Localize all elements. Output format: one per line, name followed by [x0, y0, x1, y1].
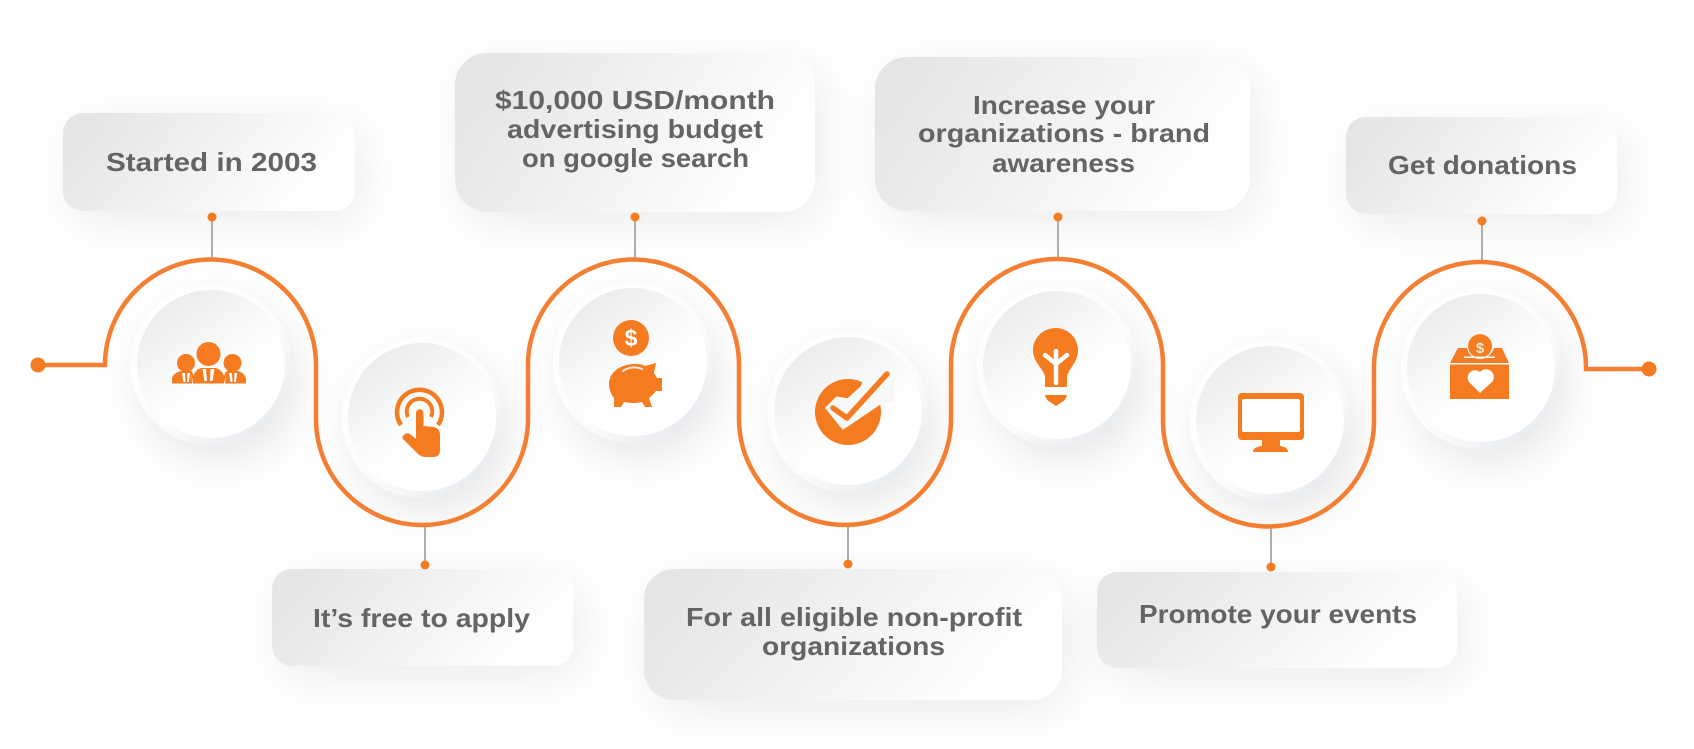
- panel: free to apply: It’s free to apply: [313, 603, 531, 633]
- circle 4: [768, 332, 934, 506]
- panel: eligible non-profits: organizations: [762, 631, 945, 661]
- icon: check mark badge: [815, 372, 893, 445]
- panel: advertising budget: $10,000 USD/month: [495, 85, 775, 115]
- panel: advertising budget: [455, 53, 823, 224]
- winding timeline curve: [38, 259, 1649, 526]
- circle 5: [976, 286, 1143, 460]
- icon: dollar coin and piggy bank: $: [625, 325, 638, 351]
- icon: touch gesture: [397, 390, 442, 457]
- panel: eligible non-profits: For all eligible non-profit: [686, 602, 1022, 632]
- panel: promote events: Promote your events: [1139, 599, 1417, 629]
- panel: free to apply: [272, 569, 581, 678]
- circle 3: [552, 282, 719, 457]
- icon: desktop monitor: [1238, 393, 1304, 452]
- timeline start dot: [30, 358, 46, 372]
- circle 1: [130, 284, 297, 459]
- panel: advertising budget: advertising budget: [507, 114, 763, 144]
- icon: donation box with coin and heart: $: [1476, 340, 1485, 357]
- connector dots: [208, 212, 1486, 572]
- connectors between panels and curve: [212, 217, 1482, 567]
- panel: get donations: [1346, 117, 1625, 226]
- timeline end dot: [1642, 362, 1656, 376]
- panel: brand awareness: organizations - brand: [918, 118, 1210, 148]
- panel: brand awareness: Increase your: [973, 90, 1155, 120]
- panel: started in 2003: Started in 2003: [106, 147, 317, 177]
- circle 2: [342, 338, 508, 512]
- panel: brand awareness: [875, 57, 1258, 223]
- icon: donation box with coin and heart: [1450, 334, 1509, 399]
- circle 6: [1190, 340, 1356, 515]
- icon: light bulb: [1033, 328, 1078, 406]
- panel: get donations: Get donations: [1388, 150, 1577, 180]
- panel: eligible non-profits: [644, 569, 1070, 712]
- icon: dollar coin and piggy bank: [609, 320, 662, 407]
- panel: advertising budget: on google search: [522, 143, 749, 173]
- circle 7: [1400, 288, 1567, 463]
- panel: started in 2003: [63, 113, 363, 223]
- icon: team of people: [172, 342, 246, 384]
- panel: brand awareness: awareness: [992, 148, 1135, 178]
- panel: promote events: [1097, 572, 1465, 680]
